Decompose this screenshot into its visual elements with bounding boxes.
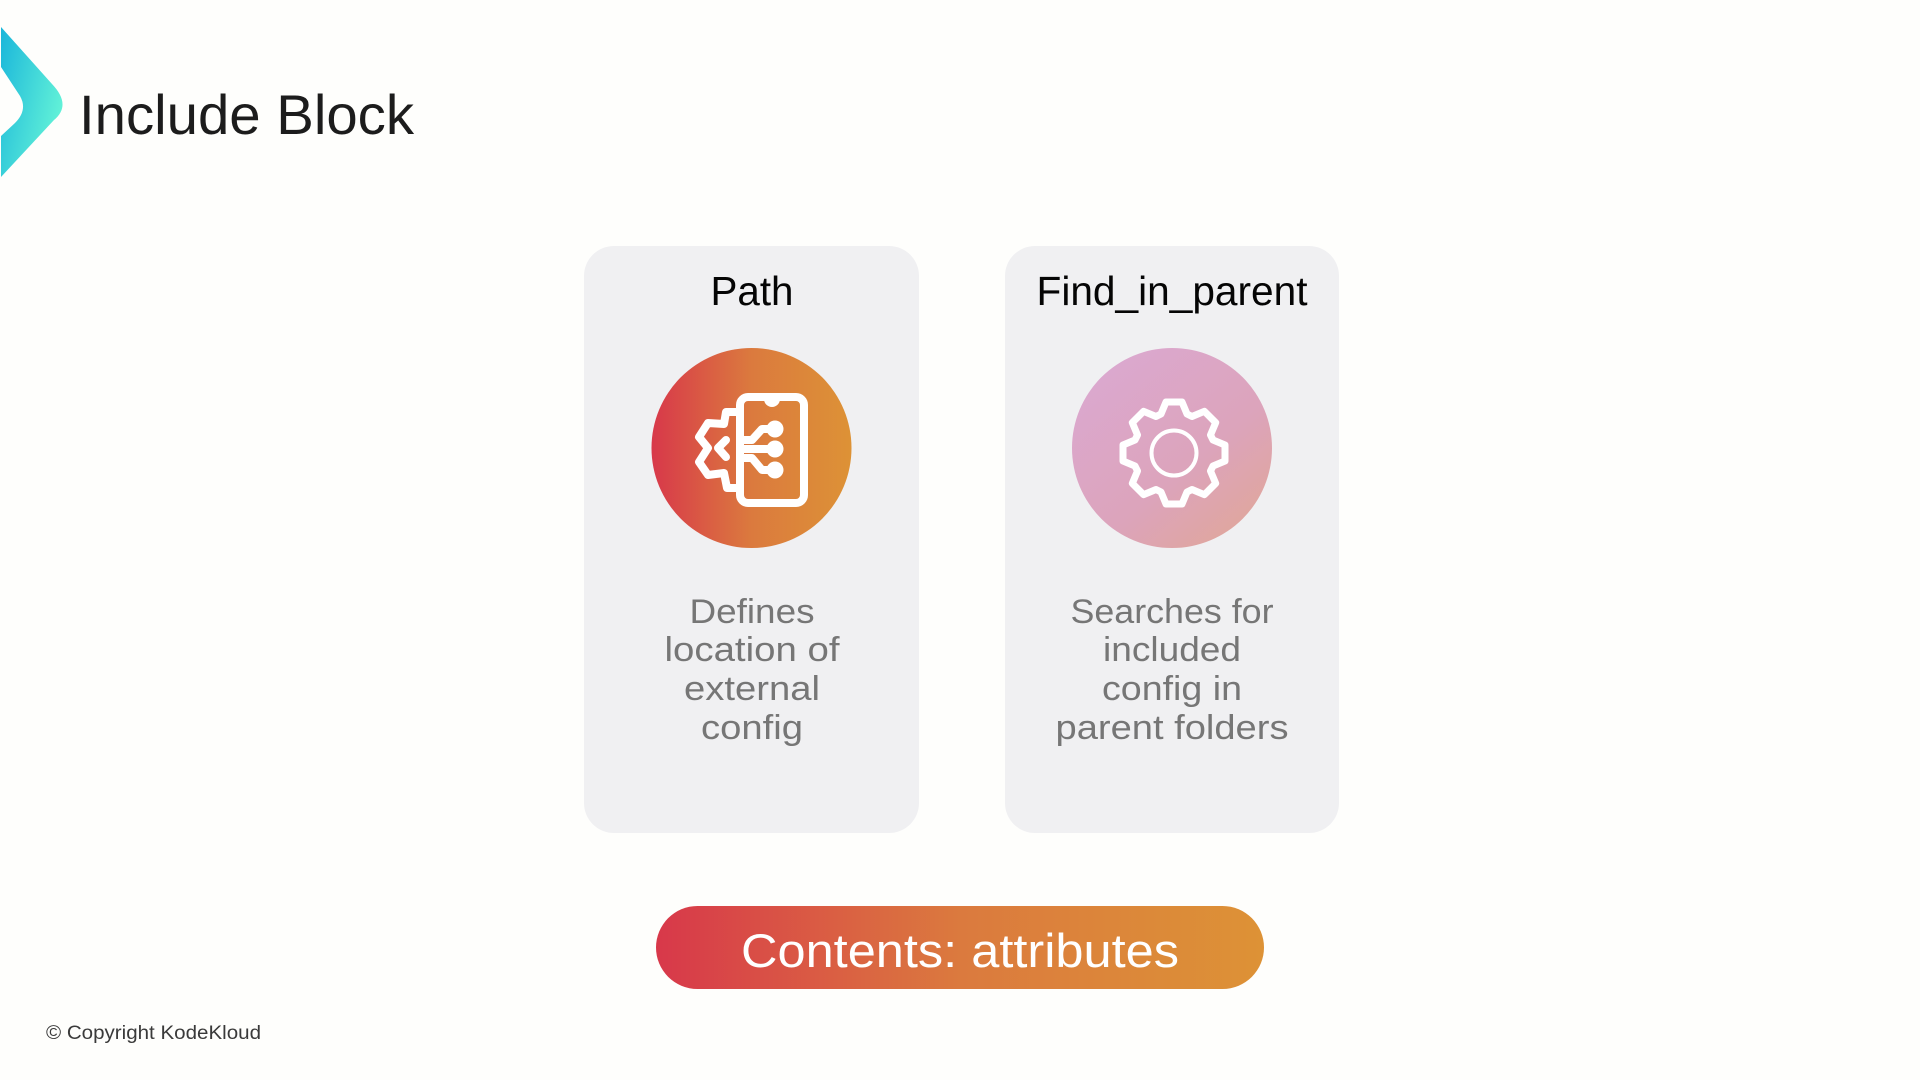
copyright footer: © Copyright KodeKloud <box>46 1022 261 1044</box>
heading: find_in_parent: Find_in_parent <box>1036 268 1308 314</box>
heading: path: Path <box>710 268 794 314</box>
description: path: Defines <box>690 593 814 631</box>
logo chevron <box>1 27 63 177</box>
card background <box>1005 246 1339 833</box>
description: path: location of <box>664 631 840 669</box>
description: find_in_parent: config in <box>1102 670 1242 708</box>
description: find_in_parent: included <box>1103 631 1241 669</box>
panel: find_in_parent <box>1005 246 1339 833</box>
title: Include Block <box>79 83 415 146</box>
description: find_in_parent <box>1056 593 1288 747</box>
description: find_in_parent: Searches for <box>1070 593 1274 631</box>
icon: gear <box>1072 348 1272 548</box>
banner: contents: Contents: attributes <box>741 924 1179 977</box>
banner: contents <box>656 906 1264 989</box>
description: find_in_parent: parent folders <box>1056 709 1288 747</box>
panel: path <box>584 246 919 833</box>
card background <box>584 246 919 833</box>
description: path: config <box>701 709 803 747</box>
description: path <box>664 593 840 747</box>
description: path: external <box>684 670 820 708</box>
icon: phone with circuit and gear <box>652 348 852 548</box>
